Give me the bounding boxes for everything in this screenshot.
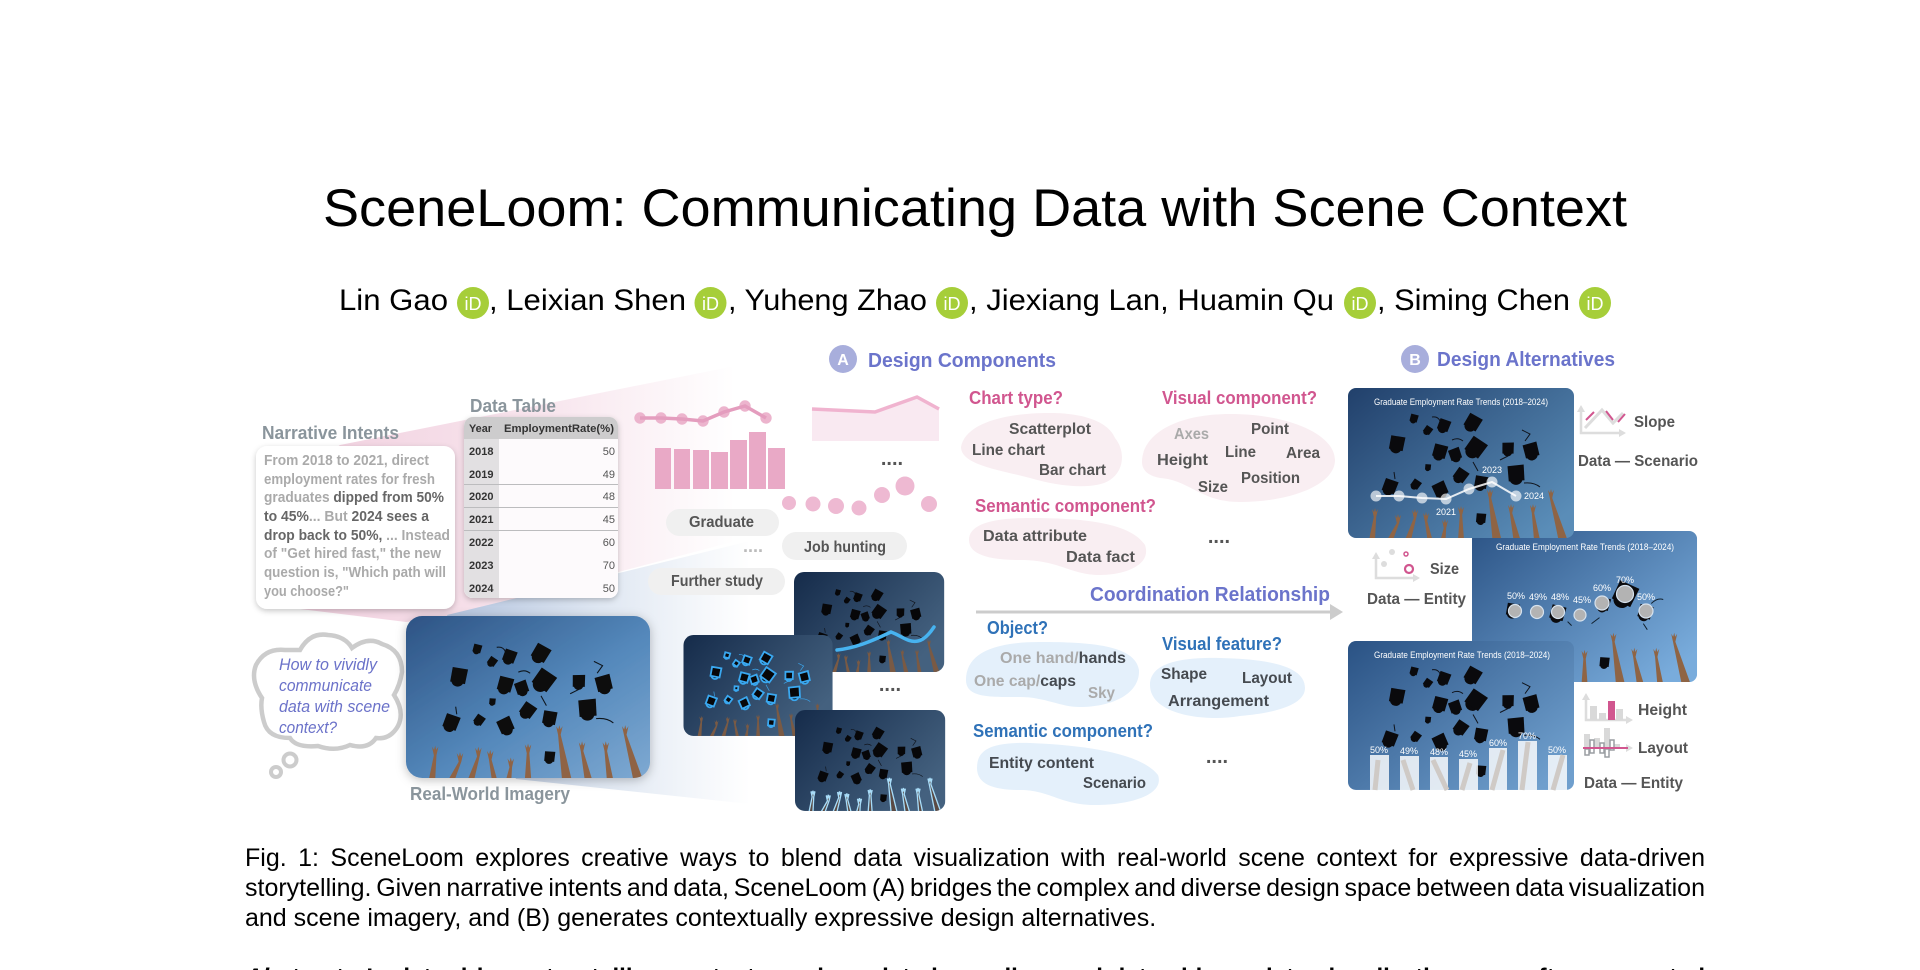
- panel: visual feature: Visual feature?: [1162, 634, 1282, 654]
- design alternative: size mapped to caps: 70%: [1616, 575, 1634, 585]
- panel: chart type: [961, 388, 1122, 486]
- data table: 49: [603, 469, 615, 481]
- caption line 1: Fig. 1: SceneLoom explores creative ways to blend data visualization with real-world scene context for expressive data-driven: [245, 844, 1705, 872]
- authors: , Siming Chen: [1377, 284, 1570, 317]
- data table: 2022: [469, 537, 493, 549]
- design alternative: bars with hands: 50%: [1548, 745, 1566, 755]
- authors: , Jiexiang Lan, Huamin Qu: [969, 284, 1334, 317]
- panel: object: [966, 618, 1139, 707]
- panel: chart type: Line chart: [972, 442, 1045, 459]
- heading: coordination relationship: Coordination Relationship: [1090, 584, 1330, 606]
- panel: visual component: Position: [1241, 470, 1300, 487]
- pill: job hunting: [782, 532, 907, 560]
- authors: , Leixian Shen: [489, 284, 686, 317]
- panel: visual feature: [1150, 634, 1305, 718]
- panel: semantic component (scene): Entity content: [989, 755, 1094, 772]
- thought bubble question: data with scene: [279, 698, 390, 716]
- ellipsis: pills: ....: [743, 536, 763, 556]
- panel: visual feature: Shape: [1161, 666, 1207, 683]
- section B header: [1401, 345, 1615, 373]
- panel: semantic component (data): Data attribute: [983, 528, 1087, 545]
- scatterplot: [782, 476, 937, 516]
- pill: graduate: Graduate: [689, 514, 754, 531]
- data table: 50: [603, 583, 615, 595]
- panel: narrative intents text card: employment rates for fresh: [264, 472, 435, 488]
- panel: object: One cap/caps: [974, 673, 1076, 690]
- icon: slope: [1577, 405, 1626, 437]
- authors: iD: [1352, 294, 1368, 314]
- design alternative: size mapped to caps: Graduate Employment Rate Trends (2018–2024): [1496, 542, 1674, 553]
- design alternative: size mapped to caps: 50%: [1637, 592, 1655, 602]
- background wedge: pink data projection: [256, 365, 740, 622]
- ellipsis: data components: ....: [1208, 526, 1230, 548]
- thought bubble question: How to vividly: [279, 656, 379, 674]
- authors: Lin Gao: [339, 284, 448, 317]
- design alternative: size mapped to caps: 50%: [1507, 591, 1525, 601]
- panel: semantic component (data): Semantic component?: [975, 496, 1156, 516]
- design alternative: bars with hands: 50%: [1370, 745, 1388, 755]
- arrow: coordination: [976, 604, 1343, 620]
- panel: visual component: Area: [1286, 445, 1320, 462]
- ellipsis: scene photos: ....: [879, 674, 901, 696]
- pill: job hunting: Job hunting: [804, 539, 886, 556]
- design alternative: line over scenario: 2024: [1524, 491, 1544, 501]
- label: data entity: Data — Entity: [1367, 591, 1466, 608]
- data table: 2018: [469, 446, 493, 458]
- authors: , Yuheng Zhao: [728, 284, 927, 317]
- panel: visual feature: Arrangement: [1168, 693, 1269, 710]
- design alternative: bars with hands: [1348, 641, 1574, 790]
- design alternative: size mapped to caps: 60%: [1593, 583, 1611, 593]
- panel: visual component: [1142, 388, 1335, 502]
- section A header: Design Components: [868, 350, 1056, 372]
- design alternative: bars with hands: Graduate Employment Rate Trends (2018–2024): [1374, 650, 1550, 661]
- data table: Year: [469, 423, 493, 435]
- thought bubble question: context?: [279, 719, 338, 737]
- data table: 2024: [469, 583, 494, 595]
- data table: 70: [603, 560, 615, 572]
- authors: [339, 284, 1611, 319]
- design alternative: size mapped to caps: [1472, 531, 1697, 684]
- heading: narrative intents: Narrative Intents: [262, 423, 399, 443]
- label: height: Height: [1638, 702, 1687, 719]
- panel: visual component: Point: [1251, 421, 1289, 438]
- design alternative: line over scenario: 2021: [1436, 507, 1456, 517]
- label: size: Size: [1430, 561, 1459, 578]
- panel: semantic component (data): [969, 496, 1156, 575]
- panel: narrative intents text card: drop back to 50%, ... Instead: [264, 528, 450, 544]
- panel: visual component: Height: [1157, 452, 1208, 469]
- panel: narrative intents text card: to 45%... But 2024 sees a: [264, 509, 430, 525]
- caption: real-world imagery: Real-World Imagery: [410, 784, 570, 804]
- icon: height: [1582, 693, 1633, 724]
- design alternative: line over scenario: [1348, 388, 1574, 540]
- ellipsis: scene components: ....: [1206, 746, 1228, 768]
- title: SceneLoom: Communicating Data with Scene Context: [323, 179, 1627, 238]
- section A header: [829, 345, 1056, 373]
- label: data scenario: Data — Scenario: [1578, 453, 1698, 470]
- line chart: [634, 400, 772, 427]
- panel: narrative intents text card: [256, 446, 455, 609]
- authors: iD: [944, 294, 960, 314]
- panel: visual component: Axes: [1174, 426, 1209, 443]
- design alternative: size mapped to caps: 45%: [1573, 595, 1591, 605]
- data table: EmploymentRate(%): [504, 423, 614, 435]
- panel: object: Object?: [987, 618, 1048, 638]
- authors: iD: [1586, 294, 1604, 314]
- authors: iD: [464, 294, 482, 314]
- design alternative: line over scenario: Graduate Employment Rate Trends (2018–2024): [1374, 397, 1548, 408]
- data table: 2020: [469, 491, 493, 503]
- bar chart: [655, 432, 785, 489]
- section A header: A: [837, 352, 849, 369]
- caption line 2: storytelling. Given narrative intents and data, SceneLoom (A) bridges the complex and diverse design space between data visualization: [245, 874, 1705, 902]
- panel: object: One hand/hands: [1000, 650, 1126, 667]
- data table: 2019: [469, 469, 493, 481]
- icon: layout: [1583, 728, 1633, 757]
- icon: size: [1372, 549, 1420, 582]
- label: layout: Layout: [1638, 740, 1688, 757]
- panel: visual feature: Layout: [1242, 670, 1292, 687]
- design alternative: bars with hands: 49%: [1400, 746, 1418, 756]
- pill: further study: Further study: [671, 573, 763, 590]
- photo: outlined caps: [684, 635, 833, 737]
- design alternative: bars with hands: 45%: [1459, 749, 1477, 759]
- panel: narrative intents text card: of "Get hired fast," the new: [264, 546, 442, 562]
- data table: 50: [603, 446, 615, 458]
- panel: visual component: Visual component?: [1162, 388, 1317, 408]
- pill: further study: [648, 568, 785, 595]
- pill: graduate: [666, 509, 779, 536]
- panel: narrative intents text card: graduates dipped from 50%: [264, 490, 444, 506]
- area chart: [812, 397, 939, 441]
- panel: visual component: Line: [1225, 444, 1256, 461]
- panel: narrative intents text card: you choose?": [264, 584, 349, 600]
- design alternative: bars with hands: 70%: [1518, 731, 1536, 741]
- panel: semantic component (scene): [973, 721, 1159, 805]
- panel: chart type: Chart type?: [969, 388, 1063, 408]
- data table: 2021: [469, 514, 493, 526]
- design alternative: size mapped to caps: 48%: [1551, 592, 1569, 602]
- heading: data table: Data Table: [470, 396, 556, 416]
- thought bubble question: [254, 635, 402, 777]
- section B header: Design Alternatives: [1437, 349, 1615, 371]
- photo: outlined arms: [795, 710, 945, 812]
- background wedge: blue imagery projection: [447, 541, 750, 804]
- photo: line overlay: [794, 572, 944, 673]
- panel: visual component: Size: [1198, 479, 1228, 496]
- panel: object: Sky: [1088, 685, 1115, 702]
- design alternative: bars with hands: 48%: [1430, 747, 1448, 757]
- ellipsis: chart options: ....: [881, 448, 903, 470]
- panel: narrative intents text card: question is, "Which path will: [264, 565, 446, 581]
- panel: narrative intents text card: From 2018 to 2021, direct: [264, 453, 429, 469]
- section B header: B: [1409, 352, 1421, 369]
- authors: iD: [702, 294, 719, 314]
- data table: 60: [603, 537, 615, 549]
- data table: 45: [603, 514, 615, 526]
- caption line 3: and scene imagery, and (B) generates contextually expressive design alternatives.: [245, 904, 1156, 932]
- label: data entity lower: Data — Entity: [1584, 775, 1683, 792]
- design alternative: bars with hands: 60%: [1489, 738, 1507, 748]
- design alternative: size mapped to caps: 49%: [1529, 592, 1547, 602]
- design alternative: line over scenario: 2023: [1482, 465, 1502, 475]
- thought bubble question: communicate: [279, 677, 372, 695]
- panel: semantic component (scene): Semantic component?: [973, 721, 1153, 741]
- panel: semantic component (data): Data fact: [1066, 549, 1135, 566]
- main real-world photo: [406, 616, 650, 780]
- data table: 48: [603, 491, 615, 503]
- panel: chart type: Bar chart: [1039, 462, 1106, 479]
- label: slope: Slope: [1634, 414, 1675, 431]
- data table: [464, 417, 618, 598]
- data table: 2023: [469, 560, 493, 572]
- panel: chart type: Scatterplot: [1009, 421, 1091, 438]
- panel: semantic component (scene): Scenario: [1083, 775, 1146, 792]
